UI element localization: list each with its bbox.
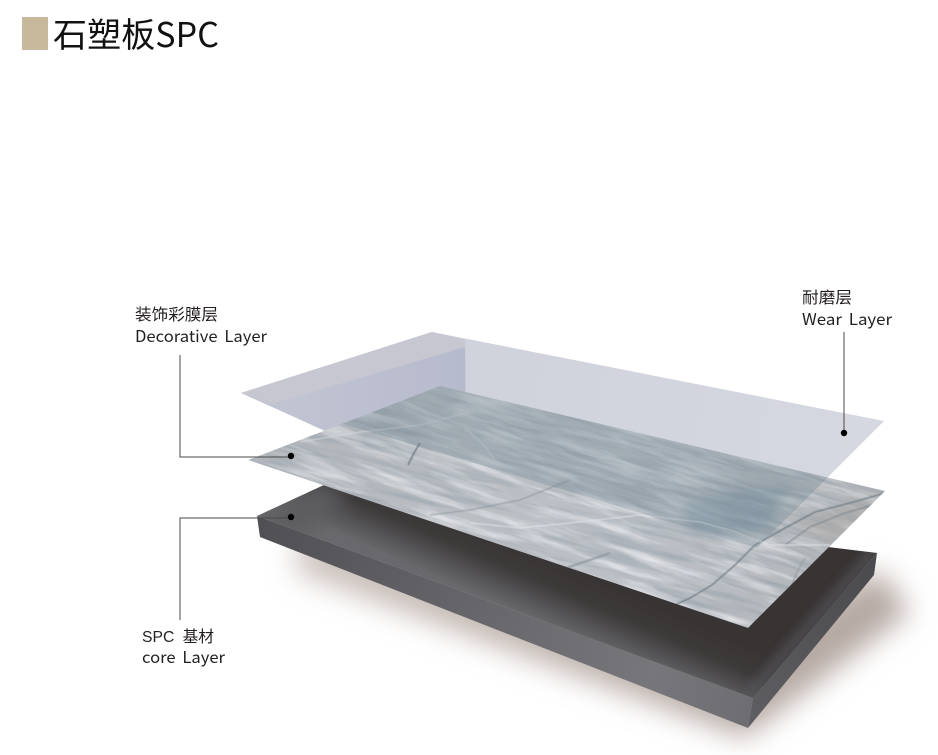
title: 石塑板SPC: [53, 8, 219, 57]
wear sheet tint over marble: [343, 386, 828, 548]
label text: wear layer: Wear Layer: [802, 306, 893, 330]
core right face: [748, 553, 877, 728]
dot: core layer: [288, 514, 294, 520]
leader line: wear layer: [843, 332, 845, 433]
marble veins: [300, 412, 885, 612]
leader line: decorative layer: [180, 355, 291, 457]
label text: decorative layer: 装饰彩膜层: [135, 306, 218, 324]
marble base: [248, 386, 885, 628]
label text: core layer: core Layer: [142, 644, 226, 668]
wear sheet top band: [241, 332, 465, 404]
decorative marble layer: [248, 386, 885, 628]
marble light grain: [253, 393, 880, 628]
callout: wear layer: [802, 289, 893, 436]
wear sheet main: [241, 332, 884, 548]
label text: core layer: SPC 基材: [142, 628, 214, 646]
core front face: [257, 516, 753, 728]
label text: core layer: [142, 628, 226, 668]
dot: decorative layer: [288, 453, 294, 459]
marble blue cloud: [680, 485, 790, 533]
title block: [22, 8, 219, 57]
marble fine grain: [250, 397, 885, 628]
leader line: core layer: [180, 518, 291, 620]
core top sheen: [250, 482, 880, 700]
title colour square: [22, 17, 48, 50]
wear layer sheet: [241, 332, 884, 548]
core top face: [257, 485, 877, 698]
wear sheet left reflection: [241, 332, 466, 440]
label text: decorative layer: Decorative Layer: [135, 323, 268, 347]
floor shadow: [295, 535, 910, 738]
marble right tip stripes: [796, 496, 877, 544]
label text: decorative layer: [135, 306, 268, 347]
callout: core layer: [142, 514, 294, 668]
label text: wear layer: [802, 289, 893, 330]
dot: wear layer: [841, 430, 847, 436]
label text: wear layer: 耐磨层: [802, 289, 852, 307]
SPC core layer slab: [250, 482, 880, 728]
callout: decorative layer: [135, 306, 294, 459]
